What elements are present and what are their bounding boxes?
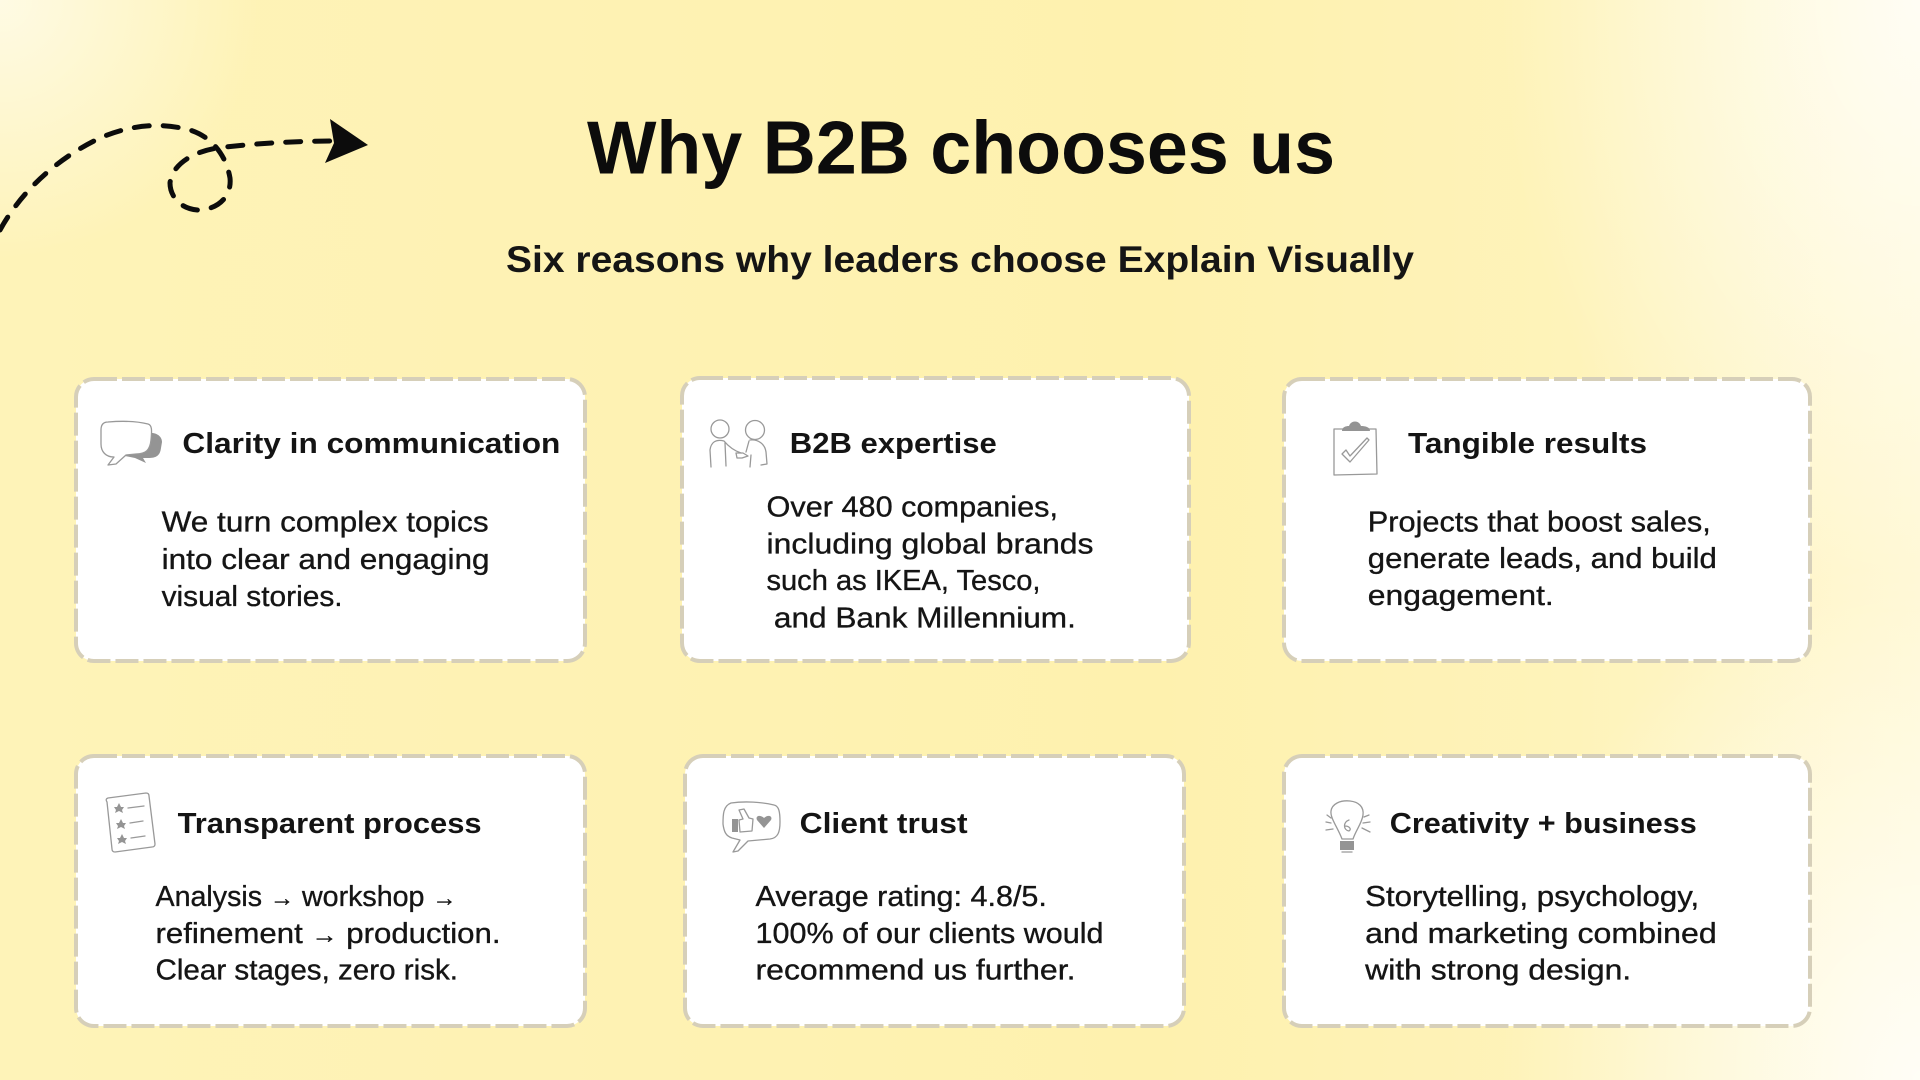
card body: and Bank Millennium. — [774, 602, 1076, 634]
panel: transparent process — [76, 756, 585, 1026]
icon: handshake — [710, 420, 767, 467]
card body: We turn complex topics — [162, 506, 489, 538]
panel: creativity + business — [1284, 756, 1810, 1026]
card heading: Tangible results — [1408, 428, 1647, 460]
card body — [1368, 506, 1717, 612]
card frame — [1284, 756, 1810, 1026]
card body — [162, 506, 490, 613]
card heading: Creativity + business — [1390, 808, 1697, 840]
icon: speech bubbles — [101, 421, 162, 465]
card body: Storytelling, psychology, — [1365, 881, 1699, 913]
card frame — [685, 756, 1184, 1026]
card body: Average rating: 4.8/5. — [756, 881, 1047, 913]
card body: refinement → production. — [156, 918, 500, 950]
card body — [766, 492, 1094, 634]
card body: including global brands — [766, 528, 1094, 560]
card body: recommend us further. — [756, 955, 1076, 987]
subtitle: Six reasons why leaders choose Explain Visually — [506, 239, 1414, 280]
card heading: Transparent process — [178, 808, 482, 840]
card body — [156, 881, 500, 987]
icon: light bulb — [1326, 801, 1370, 852]
panel: B2B expertise — [682, 378, 1189, 661]
card heading: Client trust — [800, 808, 968, 840]
card body: Projects that boost sales, — [1368, 506, 1711, 538]
panel: client trust — [685, 756, 1184, 1026]
card body — [756, 881, 1104, 987]
card body: such as IKEA, Tesco, — [766, 565, 1040, 597]
card body: with strong design. — [1364, 955, 1631, 987]
card body — [1364, 881, 1717, 987]
card heading: Clarity in communication — [182, 428, 560, 460]
card frame — [76, 379, 585, 661]
card frame — [1284, 379, 1810, 661]
icon: clipboard with check — [1334, 422, 1377, 475]
card body: generate leads, and build — [1368, 543, 1717, 575]
card body: Clear stages, zero risk. — [156, 955, 458, 987]
card body: Analysis → workshop → — [156, 881, 456, 913]
panel: tangible results — [1284, 379, 1810, 661]
card body: into clear and engaging — [162, 544, 490, 576]
card body: visual stories. — [162, 581, 343, 613]
icon: dashed looping arrow — [0, 119, 368, 230]
card body: engagement. — [1368, 580, 1554, 612]
card heading: B2B expertise — [790, 428, 997, 460]
panel: clarity in communication — [76, 379, 585, 661]
card body: Over 480 companies, — [766, 492, 1058, 524]
card frame — [682, 378, 1189, 661]
title: Why B2B chooses us — [587, 106, 1335, 190]
card body: and marketing combined — [1365, 918, 1717, 950]
icon: thumbs up and heart bubble — [723, 802, 780, 852]
card frame — [76, 756, 585, 1026]
icon: star checklist — [106, 793, 155, 852]
card body: 100% of our clients would — [756, 918, 1104, 950]
